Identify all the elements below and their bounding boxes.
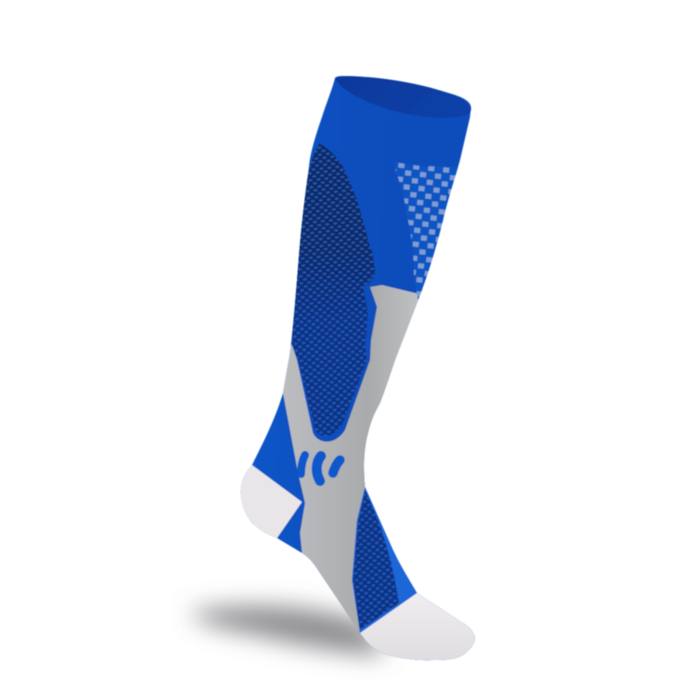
lower calf mesh panel bbox=[292, 250, 375, 436]
upper calf dark mesh panel bbox=[293, 143, 375, 320]
heel white panel bbox=[240, 464, 303, 539]
front light mesh panel bbox=[393, 162, 458, 300]
sock opening bbox=[335, 76, 471, 118]
illustration: blue compression sock bbox=[184, 75, 476, 670]
gray panel bbox=[283, 285, 425, 640]
ankle slot 1 bbox=[301, 455, 305, 474]
ground shadow bbox=[190, 606, 385, 656]
sock body bbox=[241, 76, 475, 660]
ankle slot 2 bbox=[317, 456, 321, 481]
ankle blue panel bbox=[352, 487, 417, 633]
ankle dark mesh bbox=[353, 490, 399, 630]
sock bbox=[234, 76, 475, 660]
toe white panel bbox=[360, 593, 475, 660]
ankle slot 3 bbox=[333, 460, 340, 473]
